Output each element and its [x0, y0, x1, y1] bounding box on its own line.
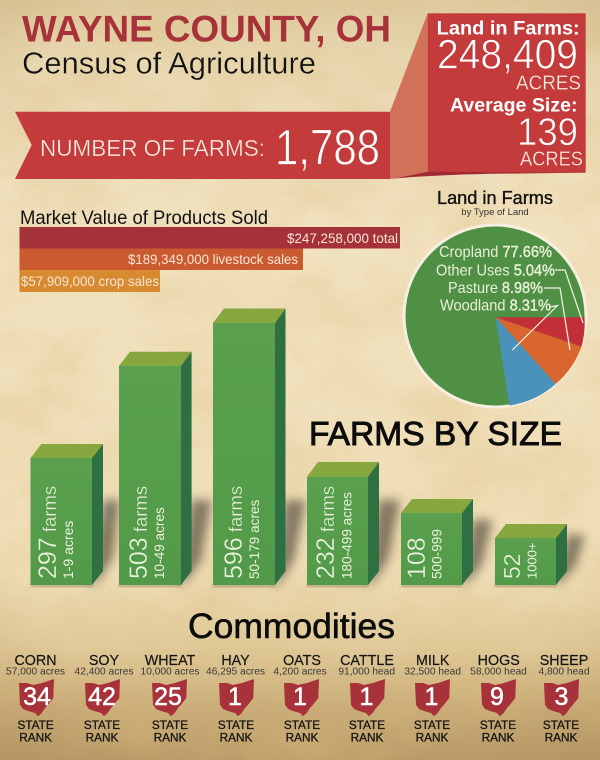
commodity: milk: STATE [414, 718, 450, 732]
commodity: hay: HAY [221, 653, 250, 669]
commodity: corn: 34 [23, 683, 51, 711]
commodity: oats: RANK [286, 731, 319, 745]
cropland slice [406, 226, 584, 406]
number of farms label: NUMBER OF FARMS: [40, 135, 265, 161]
leader lines [512, 270, 583, 350]
commodity: cattle: 1 [360, 683, 373, 711]
commodity: milk [404, 653, 461, 745]
total bar [20, 227, 400, 248]
livestock value: $189,349,000 livestock sales [128, 251, 298, 267]
bar: 180-499 acres: 180-499 acres [340, 492, 354, 579]
pasture slice [496, 317, 582, 384]
commodity: soy: 42,400 acres [75, 667, 133, 678]
commodity: hogs: HOGS [478, 653, 520, 669]
commodity: hay [206, 653, 265, 745]
commodity: hogs: 9 [490, 683, 504, 711]
market value chart [20, 208, 400, 292]
commodity: corn [6, 653, 65, 745]
woodland label: Woodland 8.31% [440, 298, 551, 315]
commodity: corn: 57,000 acres [6, 667, 65, 678]
commodity: oats: STATE [284, 718, 320, 732]
commodity: wheat: WHEAT [145, 653, 196, 669]
commodity: soy: SOY [89, 653, 120, 669]
commodity: wheat: 10,000 acres [141, 667, 199, 678]
acres unit: ACRES [520, 148, 583, 171]
box fold shadow [391, 172, 586, 179]
bar: 180-499 acres: 232 farms [312, 486, 340, 579]
bar: 10-49 acres: 503 farms [125, 486, 153, 579]
average size value: 139 [517, 111, 578, 154]
commodity: cattle [338, 653, 395, 745]
title: WAYNE COUNTY, OH [22, 9, 391, 50]
bar: 500-999 acres: 108 [403, 537, 431, 579]
commodity: hogs: STATE [480, 718, 516, 732]
land in farms label: Land in Farms: [437, 18, 580, 39]
commodity: hay: 46,295 acres [206, 667, 265, 678]
bar: 1-9 acres: 297 farms [34, 486, 62, 579]
total value: $247,258,000 total [287, 230, 398, 246]
commodity: milk: RANK [416, 731, 449, 745]
pie ring [402, 224, 588, 408]
commodity: wheat [141, 653, 199, 745]
commodity: soy: 42 [88, 683, 116, 711]
bar: 1-9 acres [30, 444, 103, 585]
commodity: soy: STATE [84, 718, 120, 732]
commodity: oats [273, 653, 327, 745]
commodity: wheat: STATE [152, 718, 188, 732]
commodity: oats: 4,200 acres [273, 667, 327, 678]
commodity: sheep: 4,800 head [538, 667, 590, 678]
acres unit: ACRES [516, 71, 581, 94]
bar: 1000+ acres: 1000+ [524, 542, 540, 579]
woodland slice [496, 317, 556, 406]
other uses label: Other Uses 5.04% [436, 263, 555, 280]
commodity: sheep: STATE [543, 718, 579, 732]
commodity: hogs [470, 653, 527, 745]
bar: 1000+ acres [495, 524, 567, 585]
commodity: hay: RANK [220, 731, 253, 745]
pie heading: Land in Farms [437, 188, 553, 208]
commodity: corn: RANK [19, 731, 52, 745]
bar: 50-179 acres: 596 farms [220, 486, 248, 579]
bar: 1000+ acres: 52 [499, 553, 525, 579]
chart heading: Market Value of Products Sold [20, 208, 268, 229]
commodity: wheat: RANK [154, 731, 187, 745]
commodity: hay: 1 [228, 683, 242, 711]
commodity: milk: 32,500 head [404, 667, 461, 678]
bar: 50-179 acres [213, 308, 286, 585]
commodity: oats: OATS [283, 653, 321, 669]
commodity: soy: RANK [86, 731, 119, 745]
commodity: hogs: RANK [482, 731, 515, 745]
livestock bar [20, 248, 303, 270]
commodity: hogs: 58,000 head [470, 667, 527, 678]
bar: 10-49 acres: 10-49 acres [152, 507, 167, 579]
commodity: sheep [538, 653, 590, 745]
land in farms pie chart [402, 188, 588, 408]
land and size stats box [391, 13, 586, 179]
ribbon fold [390, 13, 428, 179]
bar shadows [92, 500, 585, 585]
commodity: cattle: RANK [351, 731, 384, 745]
commodity: sheep: 3 [555, 683, 568, 711]
farms by size heading: FARMS BY SIZE [309, 415, 562, 452]
average size label: Average Size: [450, 96, 578, 117]
bar: 1-9 acres: 1-9 acres [60, 521, 76, 579]
commodity: sheep: SHEEP [540, 653, 588, 669]
subtitle: Census of Agriculture [22, 45, 316, 80]
crop bar [20, 270, 160, 292]
pie subheading: by Type of Land [461, 207, 529, 218]
commodity: milk: MILK [416, 653, 450, 669]
bar: 50-179 acres: 50-179 acres [247, 499, 262, 579]
other uses slice [496, 317, 585, 347]
bar: 180-499 acres [307, 462, 379, 585]
commodity: corn: STATE [17, 718, 54, 732]
commodity: cattle: STATE [349, 718, 385, 732]
land in farms value: 248,409 [437, 30, 578, 77]
commodity: oats: 1 [293, 683, 307, 711]
number of farms value: 1,788 [275, 119, 380, 175]
commodity: hay: STATE [218, 718, 254, 732]
cropland label: Cropland 77.66% [439, 244, 552, 261]
commodity: cattle: CATTLE [340, 653, 394, 669]
bar: 500-999 acres [401, 499, 473, 585]
title [22, 9, 391, 80]
commodity: soy [75, 653, 133, 745]
crop value: $57,909,000 crop sales [21, 273, 159, 289]
commodity: corn: CORN [14, 653, 57, 669]
pasture label: Pasture 8.98% [448, 280, 543, 297]
commodities row [6, 653, 590, 745]
bar: 500-999 acres: 500-999 [430, 529, 444, 579]
commodities heading: Commodities [188, 606, 395, 646]
commodity: sheep: RANK [545, 731, 578, 745]
commodity: wheat: 25 [154, 683, 182, 711]
bar: 10-49 acres [119, 352, 192, 585]
farms by size bar chart [30, 308, 585, 587]
commodity: cattle: 91,000 head [338, 667, 395, 678]
commodity: milk: 1 [425, 683, 438, 711]
ground shadow [31, 584, 556, 587]
red ribbon banner [15, 13, 428, 179]
